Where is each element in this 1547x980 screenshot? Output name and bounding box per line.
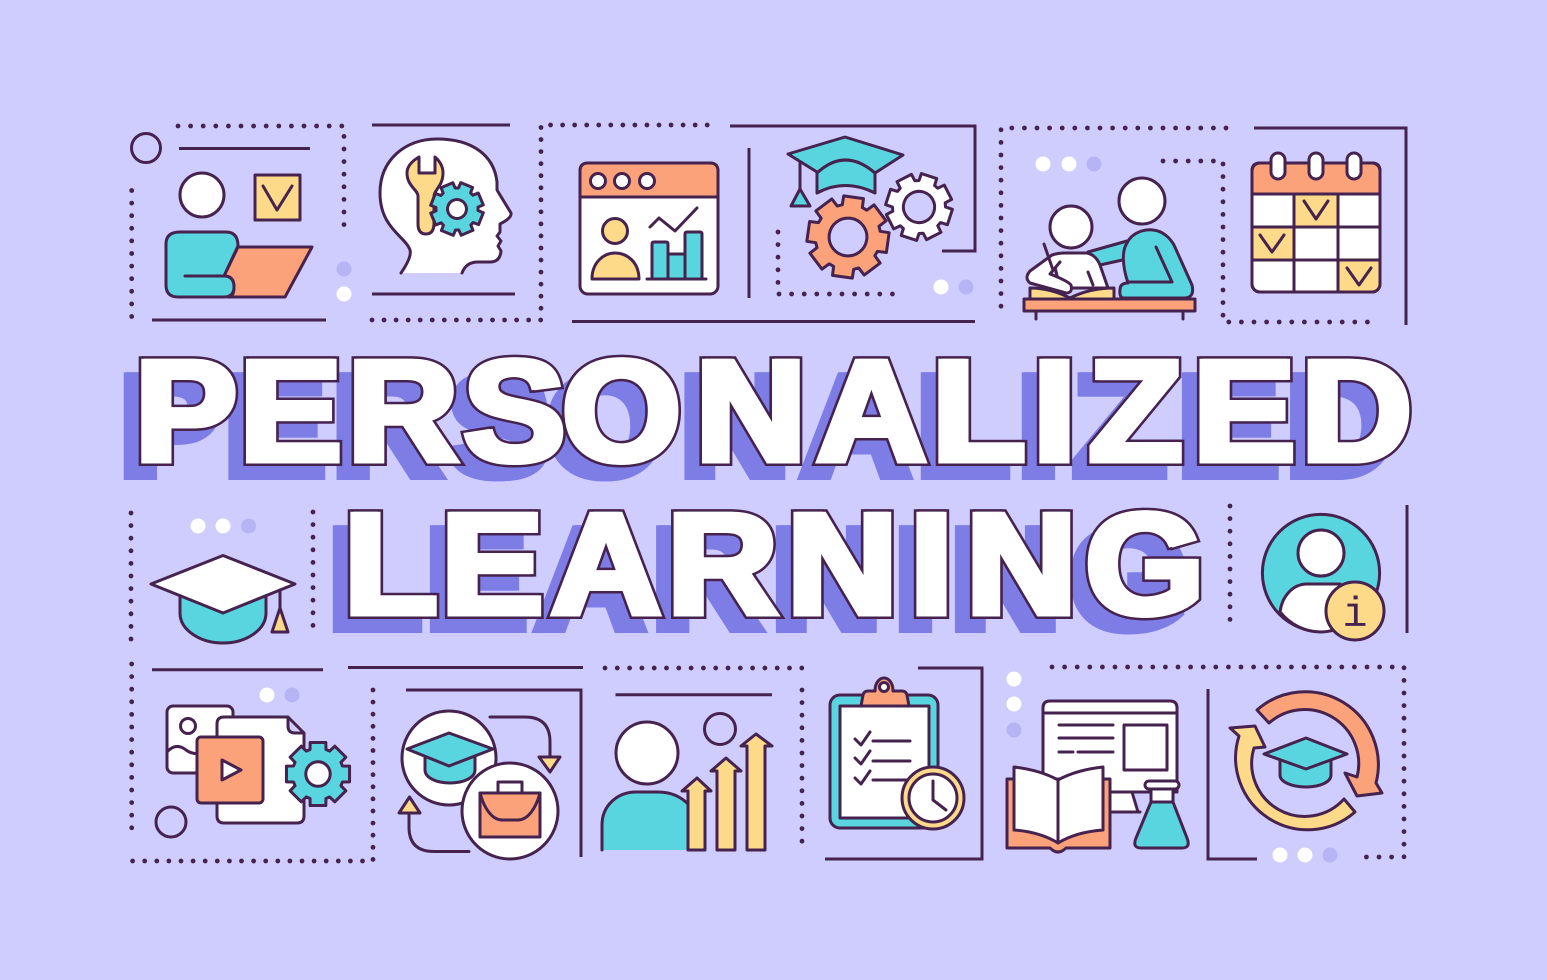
icon: mortarboard bbox=[151, 556, 295, 643]
icon: document bbox=[217, 717, 304, 823]
title white fill: PERSONALIZED bbox=[137, 329, 1413, 492]
icon: open notebook bbox=[1030, 288, 1114, 299]
icon: video tile bbox=[197, 737, 263, 803]
icon: avatar head bbox=[1298, 530, 1344, 576]
title shadow: PERSONALIZED bbox=[118, 344, 1394, 507]
panel: tutor and student bbox=[1001, 128, 1380, 322]
arrow: orange arc bbox=[1257, 692, 1382, 796]
title outline: LEARNING bbox=[346, 482, 1206, 645]
icon: paper bbox=[840, 706, 929, 818]
title shadow: PERSONALIZED bbox=[121, 344, 1397, 507]
icon: head silhouette bbox=[380, 139, 511, 273]
panel: study materials bbox=[1006, 667, 1404, 857]
title white fill: PERSONALIZED bbox=[134, 329, 1410, 492]
icon: checkbox bbox=[255, 175, 300, 220]
icon: person bbox=[592, 218, 639, 279]
icon: cap circle bbox=[402, 711, 496, 805]
icon: image card bbox=[167, 706, 233, 773]
icon: clipboard bbox=[830, 695, 938, 828]
icon: orange gear bbox=[803, 192, 893, 282]
panel: graduation cap and gears bbox=[572, 126, 975, 322]
icon: student head bbox=[180, 173, 224, 217]
title shadow: LEARNING bbox=[330, 497, 1190, 660]
icon: teal gear bbox=[423, 175, 491, 243]
icon: clip bbox=[861, 678, 909, 706]
icon: mortarboard bbox=[788, 137, 903, 206]
arrow: down bbox=[490, 717, 560, 772]
icon: laptop bbox=[224, 247, 312, 297]
title white fill: LEARNING bbox=[346, 482, 1206, 645]
icon: browser window bbox=[580, 163, 718, 294]
icon: avatar body bbox=[1280, 584, 1360, 632]
icon: flask bbox=[1135, 781, 1188, 848]
panel: head with wrench and gear bbox=[372, 125, 710, 320]
icon: calendar rings bbox=[1271, 153, 1361, 179]
icon: tutor head bbox=[1119, 178, 1165, 224]
title: Personalized Learning bbox=[118, 329, 1413, 660]
title white fill: LEARNING bbox=[343, 482, 1203, 645]
icon: avatar circle bbox=[1262, 514, 1380, 632]
title outline: PERSONALIZED bbox=[134, 329, 1410, 492]
panel: checklist with clock bbox=[825, 668, 982, 859]
panel: user info bbox=[1230, 505, 1407, 640]
icon: calendar checks bbox=[1260, 201, 1371, 285]
title white fill bbox=[134, 329, 1413, 645]
panel: learning cycle bbox=[1208, 689, 1382, 862]
icon: calendar grid bbox=[1252, 163, 1380, 292]
icon: info badge bbox=[1326, 582, 1384, 640]
panel: calendar bbox=[1252, 128, 1406, 325]
title shadow: LEARNING bbox=[327, 497, 1187, 660]
panel: growth chart bbox=[602, 668, 802, 850]
icon: white gear bbox=[878, 166, 960, 248]
panel: education to career bbox=[399, 690, 581, 859]
icon: person bbox=[602, 722, 690, 850]
panel: analytics window bbox=[580, 163, 718, 294]
icon: info badge: i bbox=[1342, 591, 1368, 639]
title outline: PERSONALIZED bbox=[137, 329, 1413, 492]
arrow: yellow arc bbox=[1230, 726, 1355, 830]
icon: briefcase circle bbox=[462, 763, 558, 859]
panel: graduation cap bbox=[131, 512, 313, 643]
icon: tutor arm bbox=[1088, 241, 1127, 265]
icon: wrench bbox=[407, 157, 443, 234]
icon: gear bbox=[286, 742, 350, 806]
icon: desk bbox=[1024, 299, 1195, 319]
panel: student at laptop bbox=[132, 126, 352, 320]
icon: growth arrows bbox=[682, 734, 772, 850]
icon: student body bbox=[166, 232, 238, 297]
icon: tutor body bbox=[1120, 230, 1193, 298]
title outline: LEARNING bbox=[343, 482, 1203, 645]
icon: student arm and pencil bbox=[1027, 244, 1093, 293]
arrow: up bbox=[399, 797, 469, 852]
icon: student head bbox=[1050, 206, 1092, 248]
panel: media files bbox=[131, 664, 583, 861]
title outline bbox=[134, 329, 1413, 645]
bar chart bbox=[647, 208, 706, 279]
icon: monitor bbox=[1043, 701, 1177, 812]
icon: open book bbox=[1007, 767, 1110, 852]
icon: window header bbox=[580, 163, 718, 197]
icon: clock bbox=[902, 767, 964, 829]
icon: mortarboard bbox=[1264, 738, 1347, 787]
title shadow bbox=[118, 344, 1397, 660]
icon: student body bbox=[1052, 253, 1108, 288]
icon: checklist bbox=[855, 732, 910, 784]
